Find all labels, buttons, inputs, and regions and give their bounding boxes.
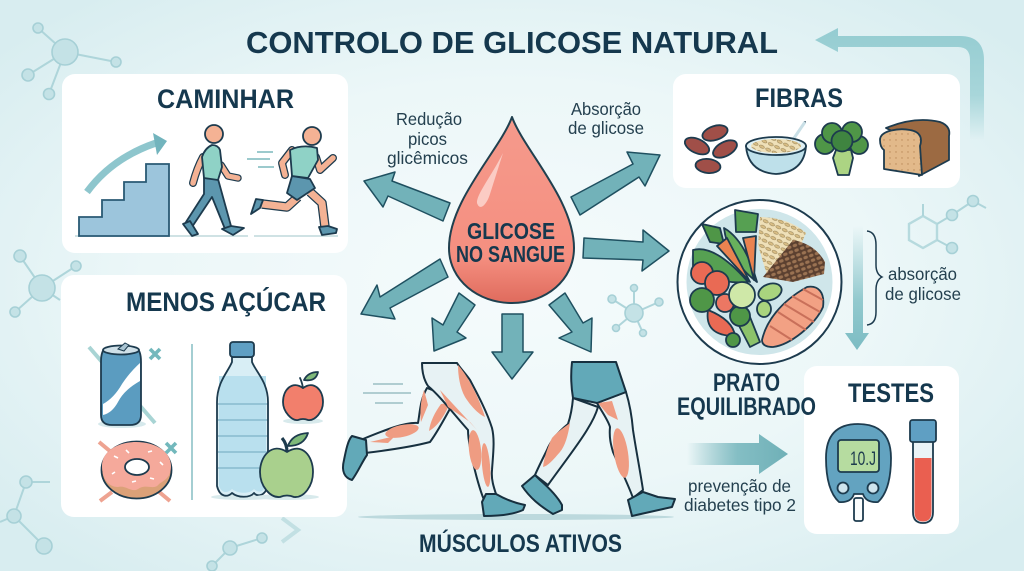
decorative small chevron arrow: [282, 518, 298, 542]
icon: ground lines: [75, 235, 338, 237]
molecule: hexagon right: [909, 196, 986, 254]
arrow: upper right: [571, 152, 660, 215]
label: absorção de glicose right: absorção: [888, 264, 957, 284]
icon: red apple: [283, 372, 323, 424]
label: absorção de glicose right: [885, 264, 961, 304]
heading: prato equilibrado: PRATO: [713, 369, 780, 397]
label: prevenção de diabetes tipo 2: diabetes tipo 2: [684, 495, 796, 515]
plate: lentils: [763, 240, 825, 282]
molecule: left middle: [10, 250, 81, 317]
meter reading: 10.J: [850, 449, 876, 470]
label: redução picos glicêmicos: glicêmicos: [387, 148, 468, 168]
molecule: bottom left: [0, 476, 52, 554]
divider: [191, 344, 193, 500]
molecule: top left: [22, 23, 121, 100]
heading: prato equilibrado: EQUILIBRADO: [677, 393, 816, 421]
label: prevenção de diabetes tipo 2: prevenção de: [688, 476, 791, 496]
title: CONTROLO DE GLICOSE NATURAL: [246, 25, 778, 60]
icon: running figure: [251, 127, 337, 235]
arrow: top right return: [815, 28, 984, 140]
icon: water bottle: [211, 342, 275, 500]
arrow: right: [583, 230, 669, 271]
molecule: bottom centre left: [207, 533, 267, 571]
icon: stairs: [79, 164, 169, 236]
drop label second line: NO SANGUE: [456, 241, 565, 267]
plate: cucumber: [729, 280, 784, 317]
panel: fibras: [673, 74, 960, 188]
illustration: balanced plate: [678, 200, 842, 364]
panel: caminhar: [62, 74, 348, 253]
icon: green apple: [255, 433, 319, 500]
icon: rising arrow: [87, 133, 167, 192]
molecule: centre: [608, 284, 663, 336]
arrow: plate down: [845, 226, 869, 350]
label: redução picos glicêmicos: Redução: [396, 109, 462, 129]
icon: beans: [682, 122, 740, 174]
icon: speed lines: [247, 152, 274, 167]
plate: rice: [758, 217, 806, 275]
drop label: GLICOSE: [467, 218, 555, 244]
arrow: down left: [432, 293, 475, 351]
icon: walking figure: [183, 125, 244, 236]
icon: crossed soda can: [89, 343, 160, 428]
icon: broccoli: [815, 122, 868, 175]
label: absorção de glicose top: de glicose: [568, 118, 644, 138]
plate: tomatoes: [691, 262, 735, 336]
left runner legs: [343, 363, 525, 516]
illustration: active leg muscles: [343, 362, 675, 520]
heading: menos açúcar: MENOS AÇÚCAR: [126, 286, 326, 317]
ground shadow: [358, 514, 674, 520]
icon: glucose meter: [826, 424, 891, 521]
plate: carrots: [717, 236, 756, 282]
icon: bread loaf: [880, 120, 949, 176]
arrow: down right: [549, 293, 592, 352]
panel: menos açúcar: [61, 275, 347, 517]
brace: [867, 231, 882, 325]
plate: salmon: [762, 287, 823, 347]
heading: músculos ativos: MÚSCULOS ATIVOS: [419, 528, 622, 558]
label: absorção de glicose right: de glicose: [885, 284, 961, 304]
heading: fibras: FIBRAS: [755, 83, 843, 113]
motion lines: [363, 384, 411, 403]
blood drop: [449, 117, 574, 303]
heading: caminhar: CAMINHAR: [157, 84, 294, 114]
label: absorção de glicose top: Absorção: [571, 99, 641, 119]
arrow: upper left: [364, 172, 450, 221]
label: absorção de glicose top: [568, 99, 644, 138]
icon: blood test tube: [910, 420, 936, 523]
label: redução picos glicêmicos: picos: [408, 129, 447, 149]
label: prevenção de diabetes tipo 2: [684, 476, 796, 515]
icon: oat bowl: [746, 122, 806, 174]
arrow: down: [492, 314, 533, 379]
plate: broccoli: [690, 288, 760, 347]
heading: prato equilibrado: [677, 369, 816, 421]
heading: testes: TESTES: [848, 378, 934, 408]
icon: crossed donut: [99, 442, 176, 501]
arrow: lower left: [361, 259, 448, 319]
panel: testes: [804, 366, 959, 534]
arrow: to testes: [687, 434, 788, 474]
plate: leafy greens: [693, 210, 758, 282]
label: redução picos glicêmicos: [387, 109, 468, 168]
right walker legs: [522, 362, 675, 516]
